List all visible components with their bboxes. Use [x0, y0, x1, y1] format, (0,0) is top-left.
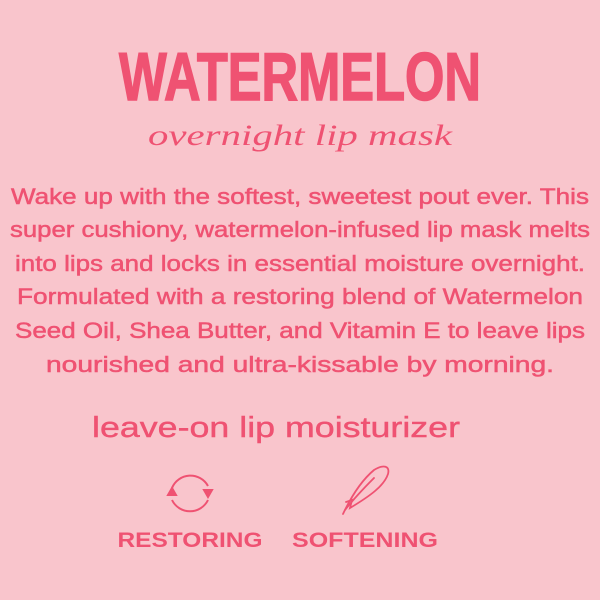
label: softening: SOFTENING — [292, 529, 438, 552]
title: WATERMELON — [119, 39, 481, 115]
label: restoring: RESTORING — [118, 529, 262, 552]
subtitle: overnight lip mask — [148, 119, 453, 152]
icon: restoring circle arrows — [168, 476, 212, 511]
description text: nourished and ultra-kissable by morning. — [46, 352, 554, 377]
description text: into lips and locks in essential moisture overnight. — [15, 251, 585, 276]
description text: Seed Oil, Shea Butter, and Vitamin E to leave lips — [15, 318, 585, 343]
tagline: leave-on lip moisturizer — [92, 412, 460, 444]
description text — [10, 184, 590, 377]
icon: feather — [343, 467, 388, 514]
description text: Formulated with a restoring blend of Watermelon — [17, 284, 583, 309]
description text: super cushiony, watermelon-infused lip mask melts — [10, 217, 590, 242]
description text: Wake up with the softest, sweetest pout ever. This — [11, 184, 589, 209]
